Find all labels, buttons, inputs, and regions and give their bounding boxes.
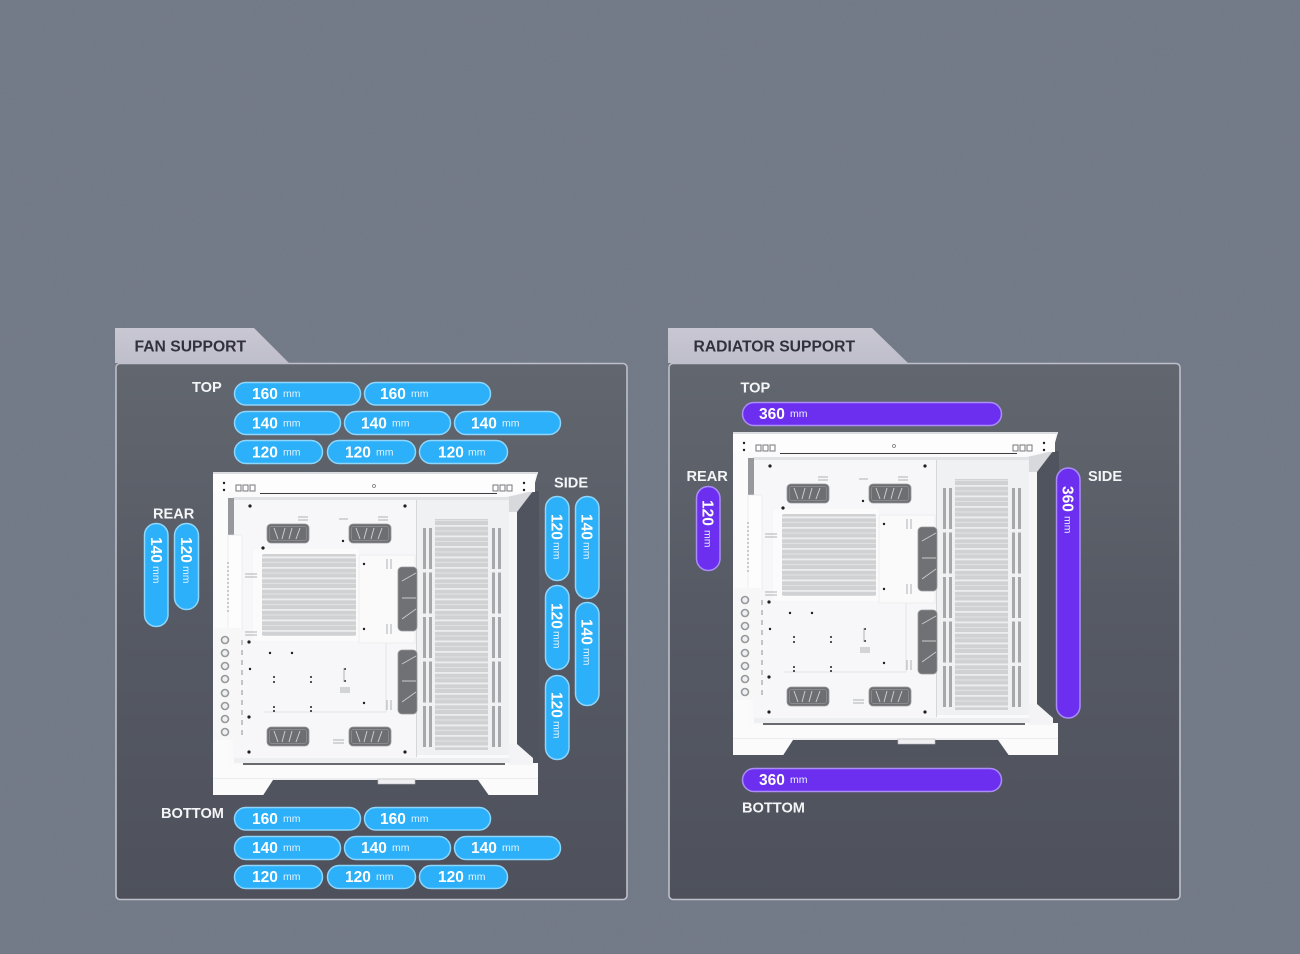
bottom 360 mm pill (742, 768, 1002, 792)
panel: fan support (115, 328, 627, 900)
label: bottom: BOTTOM (161, 806, 224, 822)
bottom 360 mm pill: mm (790, 774, 808, 786)
bottom 120 mm pills: mm (283, 871, 301, 883)
panel body: radiator support (669, 364, 1180, 900)
side pills: mm (580, 648, 592, 666)
top 160 mm pills: 160 (252, 386, 278, 403)
bottom 360 mm pill: 360 (759, 772, 785, 789)
rear pills (144, 524, 198, 626)
rear 120 mm pill: 120 (698, 500, 716, 526)
top 360 mm pill: 360 (759, 406, 785, 423)
top 140 mm pills (234, 412, 560, 434)
top 140 mm pills: mm (392, 418, 410, 430)
top 160 mm pills (234, 382, 490, 405)
side 360 mm pill: mm (1062, 516, 1074, 534)
top 140 mm pills: mm (283, 418, 301, 430)
side pills: mm (580, 542, 592, 560)
top 120 mm pills: 120 (252, 444, 278, 462)
side 360 mm pill: 360 (1058, 486, 1076, 512)
side pills: mm (550, 631, 562, 649)
label: rear: REAR (153, 506, 195, 522)
bottom 160 mm pills: mm (283, 813, 301, 825)
top 140 mm pills: mm (502, 418, 520, 430)
top 120 mm pills: mm (376, 446, 394, 458)
bottom 120 mm pills: 120 (345, 869, 371, 886)
top 140 mm pills: 140 (361, 416, 387, 432)
top 120 mm pills: mm (283, 446, 301, 458)
bottom 140 mm pills: 140 (361, 840, 387, 857)
top 120 mm pills (234, 440, 508, 464)
label: bottom: BOTTOM (742, 800, 805, 816)
tab: radiator support (668, 328, 908, 363)
rear pills: 120 (177, 537, 194, 563)
illustration: PC case (213, 472, 539, 797)
top 120 mm pills: 120 (345, 444, 371, 462)
top 120 mm pills: 120 (438, 444, 464, 462)
bottom 140 mm pills: mm (283, 842, 301, 854)
rear pills: mm (180, 566, 192, 584)
bottom 120 mm pills: mm (468, 871, 486, 883)
top 160 mm pills: mm (411, 388, 429, 400)
side pills: 140 (578, 619, 594, 645)
side pills: mm (550, 721, 562, 739)
bottom 140 mm pills (234, 836, 560, 860)
rear pills: 140 (147, 537, 164, 563)
bottom 140 mm pills: mm (392, 842, 410, 854)
top 360 mm pill: mm (790, 408, 808, 420)
label: top: TOP (192, 380, 222, 396)
rear pills: mm (150, 566, 162, 584)
bottom 140 mm pills: mm (502, 842, 520, 854)
top 140 mm pills: 140 (471, 416, 497, 432)
side pills: mm (550, 542, 562, 560)
label: rear: REAR (686, 469, 728, 485)
label: side: SIDE (554, 476, 588, 492)
bottom 160 mm pills: 160 (252, 811, 278, 828)
illustration: PC case (733, 432, 1059, 757)
bottom 160 mm pills: 160 (380, 811, 406, 828)
tab: radiator support: RADIATOR SUPPORT (694, 338, 855, 356)
top 360 mm pill (742, 402, 1002, 426)
tab: fan support (115, 328, 289, 363)
bottom 120 mm pills (234, 866, 508, 888)
bottom 120 mm pills: mm (376, 871, 394, 883)
side pills (546, 496, 599, 760)
bottom 160 mm pills (234, 808, 490, 830)
label: side: SIDE (1088, 469, 1122, 485)
top 160 mm pills: mm (283, 388, 301, 400)
top 160 mm pills: 160 (380, 386, 406, 403)
bottom 140 mm pills: 140 (471, 840, 497, 857)
bottom 160 mm pills: mm (411, 813, 429, 825)
rear 120 mm pill (696, 486, 720, 570)
side pills: 120 (548, 603, 564, 629)
tab: fan support: FAN SUPPORT (134, 338, 246, 356)
rear 120 mm pill: mm (702, 530, 714, 548)
side 360 mm pill (1056, 468, 1080, 718)
bottom 120 mm pills: 120 (438, 869, 464, 886)
top 140 mm pills: 140 (252, 416, 278, 432)
side pills: 140 (578, 514, 594, 540)
top 120 mm pills: mm (468, 446, 486, 458)
side pills: 120 (548, 514, 564, 540)
bottom 120 mm pills: 120 (252, 869, 278, 886)
panel: radiator support (668, 328, 1180, 900)
label: top: TOP (740, 380, 771, 396)
side pills: 120 (548, 692, 564, 718)
bottom 140 mm pills: 140 (252, 840, 278, 857)
panel body: fan support (116, 364, 627, 900)
